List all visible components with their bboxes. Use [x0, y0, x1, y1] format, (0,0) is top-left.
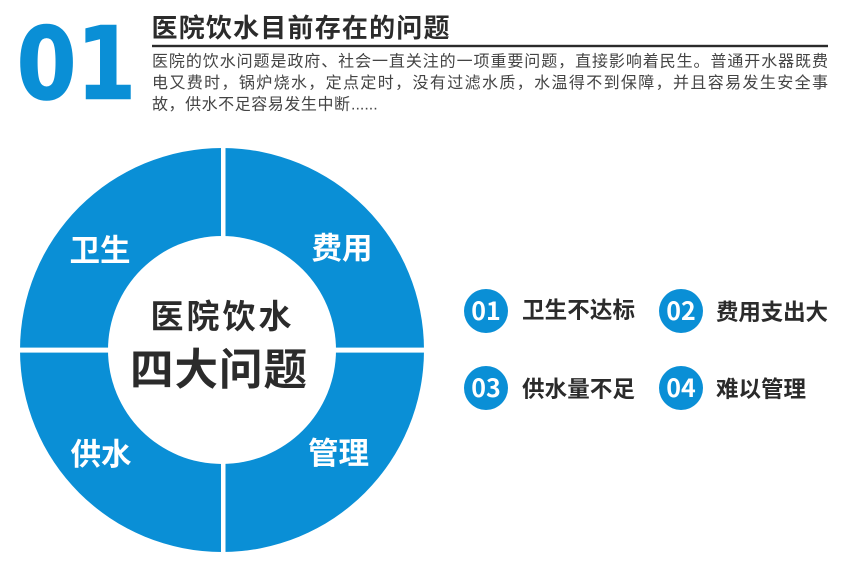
- list item 02: [659, 289, 828, 333]
- title: 医院饮水目前存在的问题: [152, 8, 450, 45]
- intro paragraph: ......: [351, 96, 378, 114]
- list item 01: [464, 289, 635, 333]
- center text: 四大问题: [130, 335, 307, 398]
- list item 03: 03: [471, 369, 501, 405]
- segment label: 供水: 供水: [70, 430, 132, 474]
- list item 01: 01: [471, 292, 501, 328]
- list item 02: 费用支出大: [716, 295, 828, 327]
- list item 01: 卫生不达标: [522, 293, 635, 325]
- segment label: 费用: 费用: [312, 224, 372, 268]
- center text: [130, 290, 307, 398]
- donut chart: four problems: [12, 140, 432, 560]
- section number 01: [17, 6, 136, 122]
- list item 04: 04: [666, 369, 696, 405]
- center circle: [108, 236, 336, 464]
- center text: 医院饮水: [150, 290, 292, 338]
- list item 04: 难以管理: [716, 372, 806, 404]
- intro paragraph: 故，供水不足容易发生中断: [152, 90, 350, 114]
- list item 03: [464, 366, 635, 410]
- segment label: 管理: 管理: [308, 429, 369, 473]
- intro paragraph: 医院的饮水问题是政府、社会一直关注的一项重要问题，直接影响着民生。普通开水器既费: [152, 48, 828, 72]
- list item 03: 供水量不足: [522, 372, 635, 404]
- section number 01: 1: [76, 6, 136, 122]
- section number 01: 0: [17, 6, 76, 122]
- intro paragraph: [152, 48, 828, 114]
- segment label: 卫生: 卫生: [70, 226, 130, 270]
- list item 02: 02: [666, 292, 696, 328]
- ring segments: [20, 148, 424, 552]
- intro paragraph: 电又费时，锅炉烧水，定点定时，没有过滤水质，水温得不到保障，并且容易发生安全事: [152, 69, 828, 93]
- list item 04: [659, 366, 806, 410]
- header: title and intro: [152, 8, 828, 114]
